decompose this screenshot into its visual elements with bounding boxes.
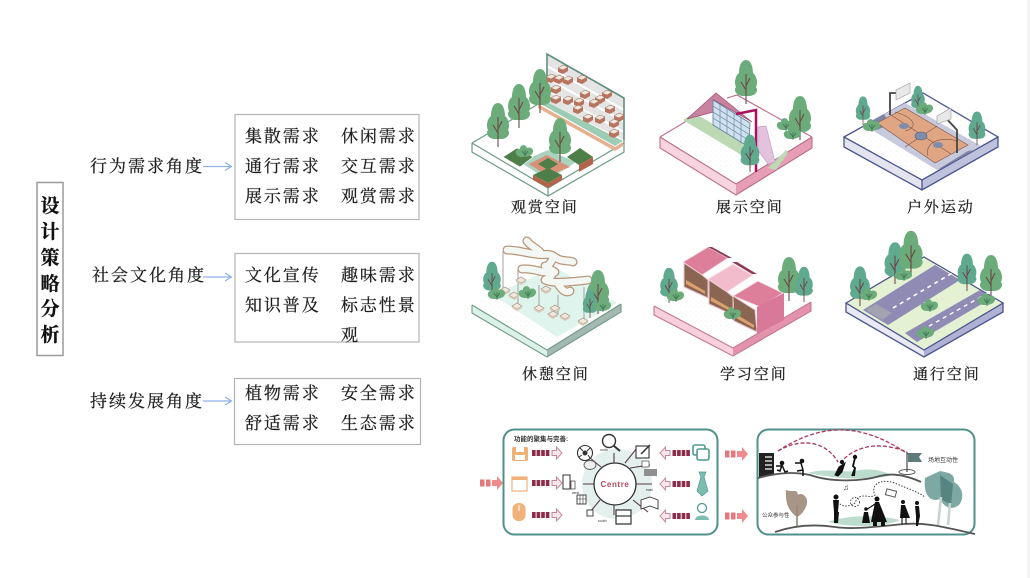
box: behaviour needs: 交互需求	[341, 157, 417, 176]
canopy poles	[503, 252, 584, 320]
panel: function diagram	[504, 430, 718, 534]
box: social culture needs	[235, 254, 419, 345]
title box: 设计策略分析	[37, 182, 63, 356]
trees	[735, 60, 811, 172]
base slab	[654, 272, 811, 348]
box: sustainability needs	[234, 378, 420, 444]
flow arrow into first diagram	[480, 476, 503, 490]
box: behaviour needs	[235, 114, 419, 220]
house 2	[708, 264, 753, 292]
mint ground	[493, 267, 617, 337]
dashed arcs	[778, 430, 908, 463]
box: behaviour needs: 通行需求	[245, 157, 321, 176]
scene: 观赏空间	[472, 54, 624, 216]
label: 场地互动性: 场地互动性	[928, 456, 958, 464]
title box: 设计策略分析: 策	[40, 247, 60, 269]
satellite icons	[563, 434, 658, 524]
dotted path and music	[835, 481, 925, 506]
right inputs	[660, 445, 709, 522]
magenta frame and panel	[736, 110, 756, 172]
caption: 通行空间	[913, 365, 981, 383]
caption: 学习空间	[720, 365, 788, 383]
box: sustainability needs: 植物需求	[245, 384, 321, 403]
base slab	[844, 93, 998, 180]
centre hub	[582, 448, 652, 519]
flow arrow: lower	[725, 509, 748, 523]
title box: 设计策略分析: 计	[40, 221, 60, 243]
base slab	[472, 267, 621, 350]
centre hub: Centre	[601, 480, 629, 489]
upper hill	[808, 469, 892, 479]
satellite icons: west	[572, 491, 579, 495]
box: social culture needs: 文化宣传	[245, 266, 321, 285]
arrow to social needs	[203, 273, 232, 281]
title box: 设计策略分析: 设	[40, 195, 60, 217]
title box: 设计策略分析: 略	[40, 273, 60, 295]
upper ground line	[758, 473, 921, 482]
lawn strip	[683, 113, 752, 156]
panel: interaction diagram	[758, 430, 975, 534]
arrow to sustainability needs	[203, 397, 232, 405]
base slab	[472, 103, 624, 188]
canopy	[507, 241, 588, 292]
box: behaviour needs: 休闲需求	[341, 126, 417, 146]
runners and seated figures	[776, 455, 857, 476]
study houses	[683, 247, 784, 334]
box: social culture needs: 标志性景	[341, 296, 417, 315]
icon: chat bubbles	[693, 445, 709, 460]
left inputs	[512, 447, 562, 521]
green wall	[547, 54, 624, 140]
court apron	[864, 103, 981, 170]
trees	[856, 86, 985, 145]
satellite icons: east	[646, 488, 653, 492]
flag	[899, 452, 922, 474]
box: social culture needs: 知识普及	[245, 296, 321, 315]
glass wall	[713, 100, 750, 147]
house 3	[733, 281, 783, 307]
box: behaviour needs: 集散需求	[245, 127, 321, 146]
planting beds	[503, 148, 593, 188]
box: sustainability needs: 舒适需求	[245, 414, 321, 433]
panel heading: 功能的聚集与完善:	[514, 434, 568, 443]
house 1	[683, 247, 728, 275]
building	[759, 453, 774, 478]
satellite icons: north	[600, 448, 608, 452]
pavilion roof	[687, 93, 752, 122]
tree: teal	[925, 471, 962, 525]
scene: 户外运动	[844, 83, 998, 216]
caption: 户外运动	[907, 199, 975, 216]
icon: person	[695, 504, 709, 520]
title box: 设计策略分析: 分	[40, 297, 60, 320]
box: sustainability needs: 安全需求	[341, 384, 417, 403]
bench	[539, 102, 623, 146]
scene: 学习空间	[654, 247, 813, 383]
row: 行为需求角度	[90, 114, 419, 220]
satellite icons: south	[598, 519, 607, 523]
icon: window	[512, 477, 527, 491]
road 1	[863, 265, 960, 325]
dotted path and music: ♫	[843, 483, 849, 492]
background edge	[1027, 0, 1030, 578]
caption: 展示空间	[716, 198, 784, 216]
lower hill	[828, 516, 900, 526]
icon: mouse	[512, 503, 526, 521]
lower ground line	[775, 524, 975, 534]
label: 持续发展角度: 持续发展角度	[90, 392, 204, 411]
box: sustainability needs: 生态需求	[341, 414, 417, 433]
icon: floppy disk	[512, 447, 528, 461]
caption: 观赏空间	[511, 198, 579, 216]
scene: 展示空间	[660, 60, 812, 216]
basketball court	[877, 108, 968, 163]
label: 公众参与性: 公众参与性	[762, 511, 790, 519]
arrow to behaviour needs	[203, 162, 232, 170]
walking figures	[833, 494, 920, 526]
row: 持续发展角度	[90, 378, 420, 444]
wall planters	[546, 65, 624, 138]
flow arrow: upper	[725, 447, 748, 461]
trees	[850, 231, 1002, 339]
box: social culture needs: 趣味需求	[341, 266, 417, 285]
trees	[483, 262, 611, 318]
box: behaviour needs: 展示需求	[245, 187, 321, 206]
base slab	[846, 257, 1003, 350]
label: 社会文化角度: 社会文化角度	[92, 266, 206, 285]
stools	[500, 277, 588, 326]
caption: 休憩空间	[522, 365, 590, 383]
trees	[487, 69, 571, 162]
trees	[660, 257, 813, 320]
scene: 通行空间	[846, 231, 1003, 383]
tree: brown	[786, 490, 807, 526]
row: 社会文化角度	[92, 254, 419, 345]
basketball hoops	[890, 83, 957, 153]
label: 行为需求角度: 行为需求角度	[90, 157, 204, 176]
box: social culture needs: 观	[341, 326, 360, 345]
title box: 设计策略分析: 析	[40, 324, 60, 346]
base slab	[660, 95, 812, 184]
road 2	[905, 290, 992, 342]
icon: necktie	[697, 472, 708, 496]
scene: 休憩空间	[472, 241, 621, 383]
box: behaviour needs: 观赏需求	[341, 187, 417, 206]
